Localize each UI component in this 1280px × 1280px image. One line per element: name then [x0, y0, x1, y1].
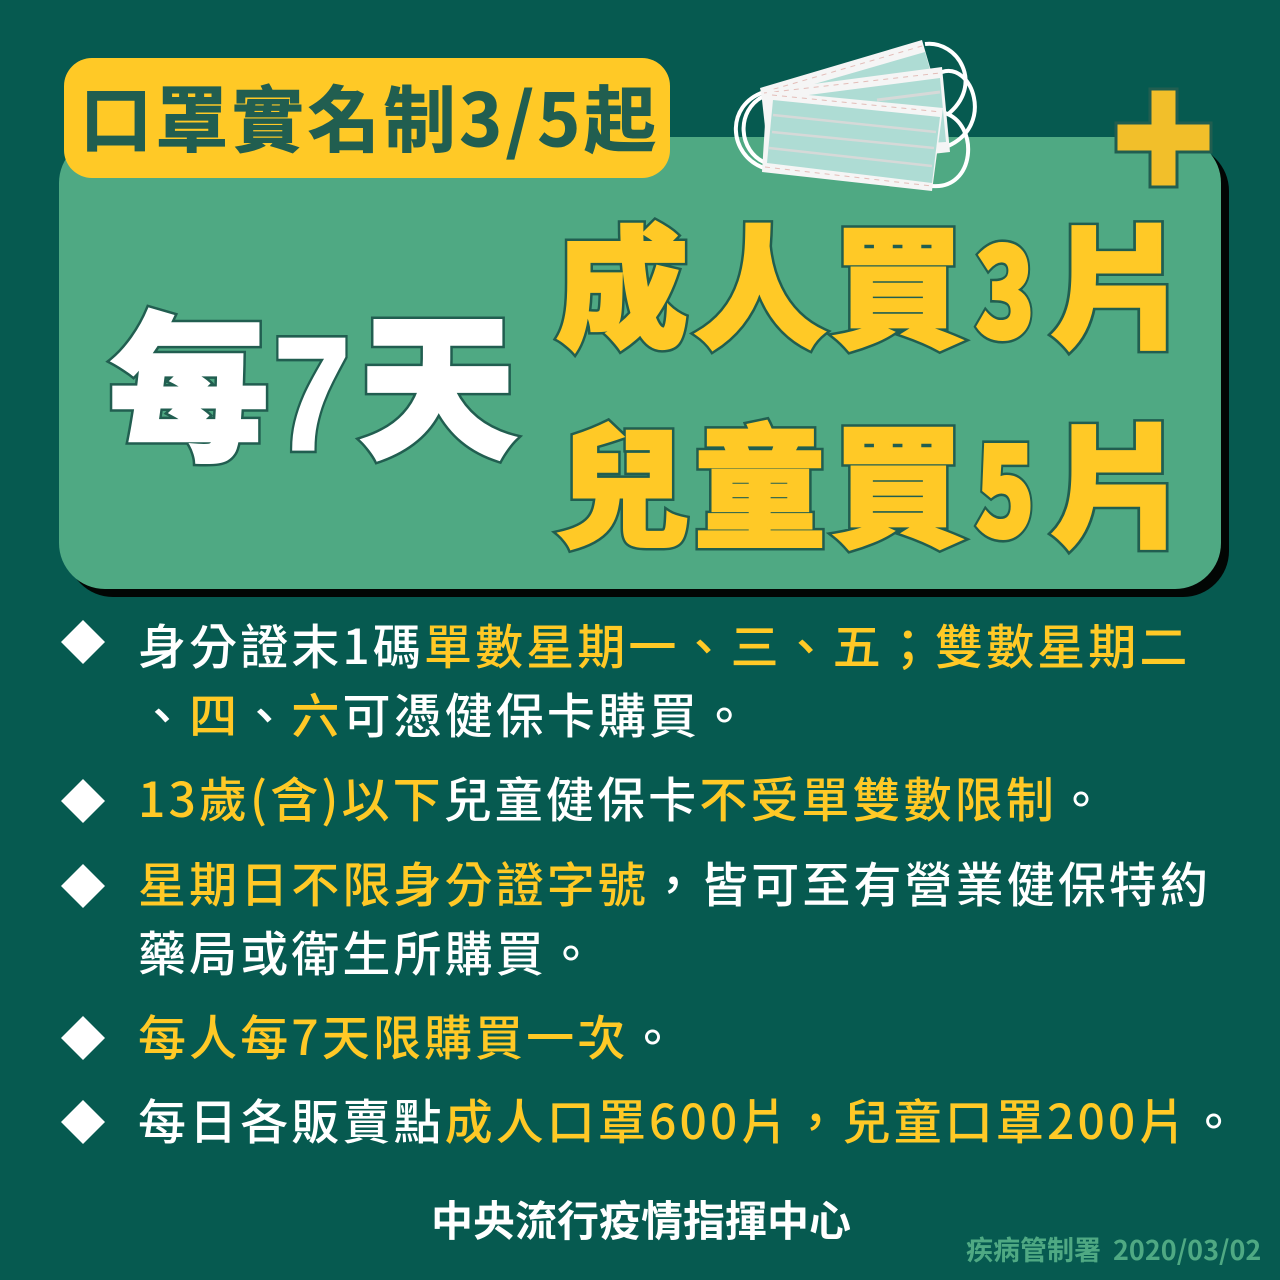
heading: children buy 5 pieces: 5: [975, 393, 1035, 574]
heading: adults buy 3 pieces: [556, 184, 1193, 376]
rule 1: [61, 608, 1190, 747]
rule 2: 13歲(含)以下: [138, 761, 444, 831]
heading: every 7 days: 每: [109, 262, 269, 494]
icon: stacked face masks: [736, 40, 975, 191]
heading: every 7 days: 每: [109, 262, 269, 494]
heading: adults buy 3 pieces: 3: [975, 194, 1035, 375]
heading: children buy 5 pieces: [556, 383, 1193, 575]
heading: children buy 5 pieces: 買: [832, 384, 964, 575]
heading: children buy 5 pieces: 兒: [556, 384, 688, 575]
heading: children buy 5 pieces: 兒: [556, 384, 688, 575]
heading: every 7 days: [109, 262, 517, 494]
rule 5: 成人口罩600片，兒童口罩200片。: [445, 1083, 1241, 1153]
heading: every 7 days: 7: [274, 305, 350, 483]
rule 3: ，皆可至有營業健保特約: [649, 846, 1211, 916]
heading: children buy 5 pieces: 童: [694, 384, 826, 575]
heading: children buy 5 pieces: 5: [975, 393, 1035, 574]
title badge: 口罩實名制3/5起: [80, 62, 656, 167]
icon: yellow plus: [1116, 89, 1211, 187]
rule 3: 星期日不限身分證字號: [138, 846, 649, 916]
footer: source and date: 2020/03/02: [1113, 1229, 1261, 1268]
heading: adults buy 3 pieces: 買: [832, 185, 964, 376]
panel: main green card: [59, 137, 1229, 597]
rule list: [61, 608, 1241, 1153]
heading: adults buy 3 pieces: 買: [832, 185, 964, 376]
rule 2: 兒童健保卡不受單雙數限制。: [444, 761, 1108, 831]
heading: children buy 5 pieces: 片: [1047, 383, 1193, 574]
heading: children buy 5 pieces: 童: [694, 384, 826, 575]
heading: every 7 days: 天: [359, 263, 517, 492]
heading: every 7 days: 天: [359, 263, 517, 492]
rule 1: 單數星期一、三、五；雙數星期二: [424, 608, 1190, 678]
heading: adults buy 3 pieces: 成: [556, 185, 688, 376]
rule 5: 每日各販賣點: [138, 1083, 445, 1153]
heading: children buy 5 pieces: 買: [832, 384, 964, 575]
heading: adults buy 3 pieces: 片: [1047, 184, 1193, 375]
heading: adults buy 3 pieces: 3: [975, 194, 1035, 375]
rule 4: 每人每7天限購買一次: [138, 999, 628, 1069]
heading: adults buy 3 pieces: 片: [1047, 184, 1193, 375]
heading: every 7 days: 7: [274, 305, 350, 483]
rule 3: 藥局或衛生所購買。: [138, 915, 598, 985]
footer: issuing agency: 中央流行疫情指揮中心: [431, 1188, 851, 1249]
heading: adults buy 3 pieces: 成: [556, 185, 688, 376]
heading: adults buy 3 pieces: 人: [694, 185, 826, 376]
heading: children buy 5 pieces: 片: [1047, 383, 1193, 574]
heading: adults buy 3 pieces: 人: [694, 185, 826, 376]
rule 1: 四、六可憑健保卡購買。: [189, 677, 751, 747]
rule 2: [61, 761, 1108, 831]
rule 1: 、: [138, 677, 189, 747]
rule 5: [61, 1083, 1241, 1153]
rule 4: 。: [628, 999, 679, 1069]
rule 1: 身分證末1碼: [138, 608, 424, 678]
footer: source and date: 疾病管制署: [966, 1229, 1101, 1268]
rule 3: [61, 846, 1211, 985]
